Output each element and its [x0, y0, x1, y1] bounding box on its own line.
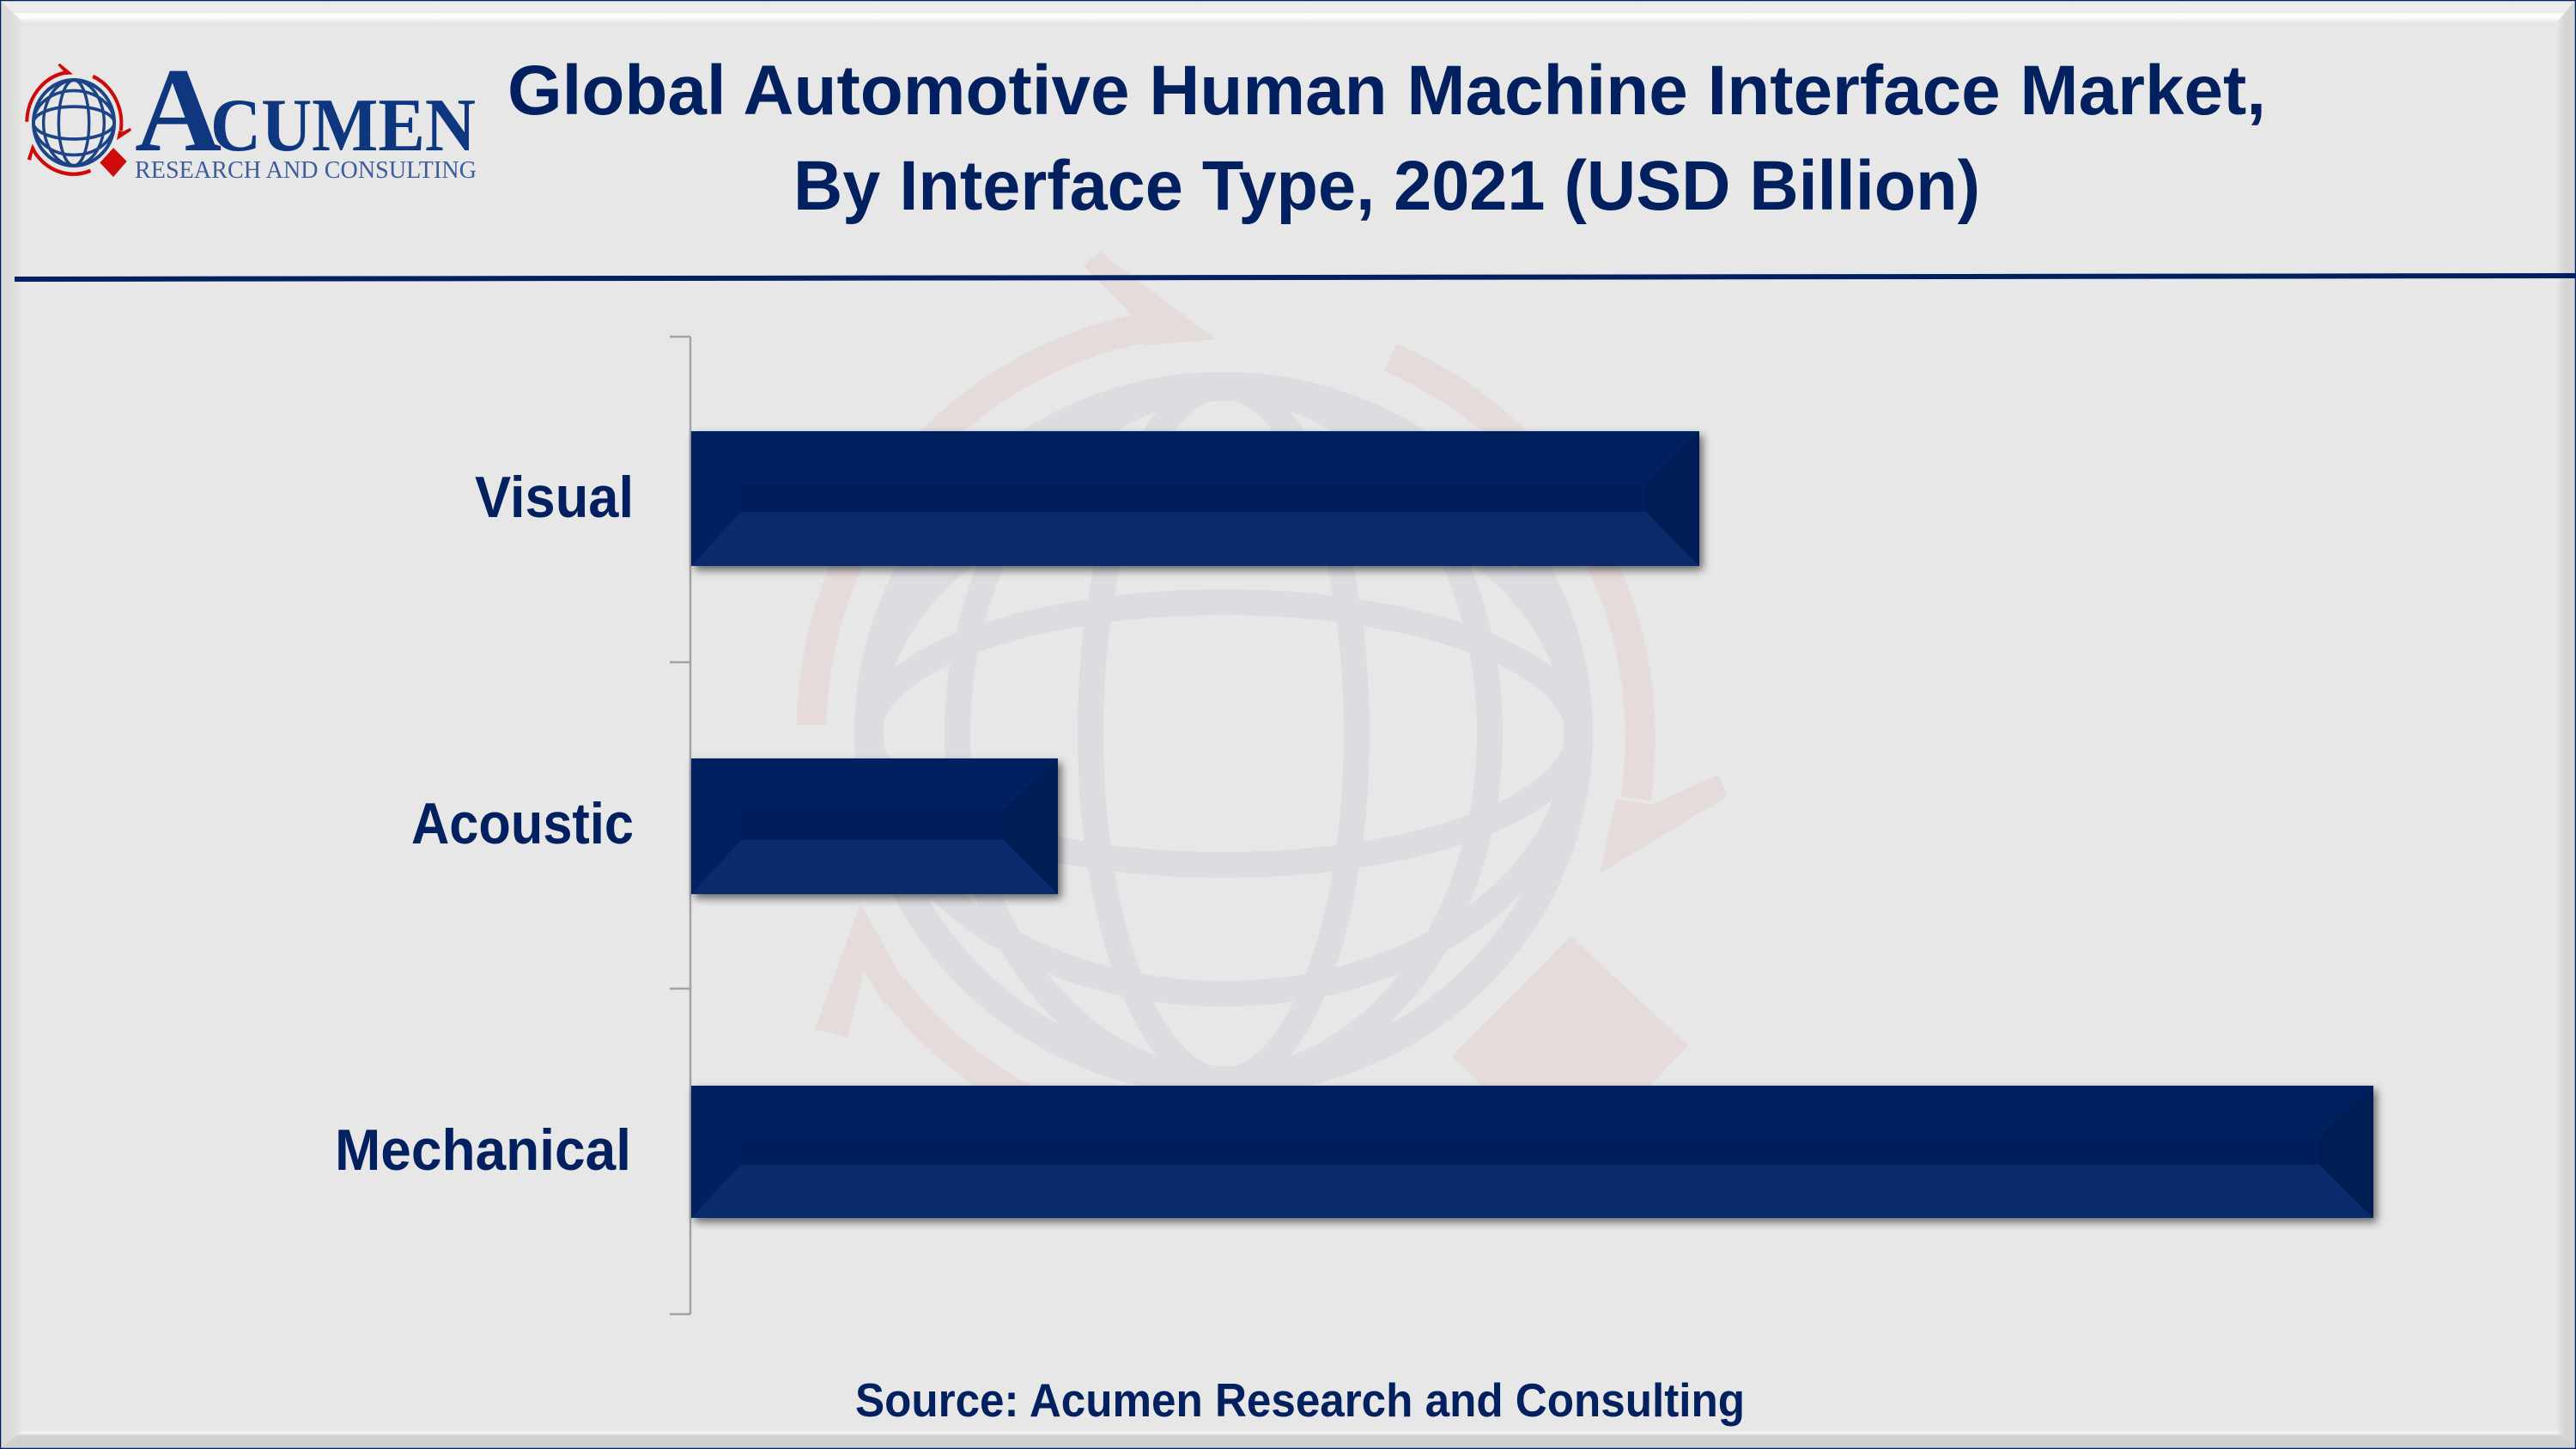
logo wordmark: A: [135, 44, 222, 177]
icon: globe with red arrows: [27, 64, 131, 177]
title: Global Automotive Human Machine Interface Market,: [507, 52, 2266, 130]
title: By Interface Type, 2021 (USD Billion): [793, 147, 1980, 225]
title: [507, 52, 2266, 225]
title divider line: [15, 273, 2576, 282]
source note: Source: Acumen Research and Consulting: [855, 1373, 1745, 1427]
label: Visual: Visual: [475, 465, 634, 530]
bar: Mechanical: [691, 1086, 2373, 1218]
label: Acoustic: Acoustic: [411, 791, 634, 856]
watermark: Acumen globe logo: [811, 252, 1728, 1172]
bar: Acoustic: [691, 758, 1058, 894]
label: Mechanical: Mechanical: [335, 1117, 631, 1183]
logo wordmark: CUMEN: [210, 84, 476, 167]
logo: Acumen Research and Consulting: [27, 44, 477, 184]
bar: Visual: [691, 431, 1699, 566]
bar chart: [335, 337, 2373, 1314]
logo tagline: RESEARCH AND CONSULTING: [135, 157, 477, 184]
chart axis: [670, 337, 690, 1314]
